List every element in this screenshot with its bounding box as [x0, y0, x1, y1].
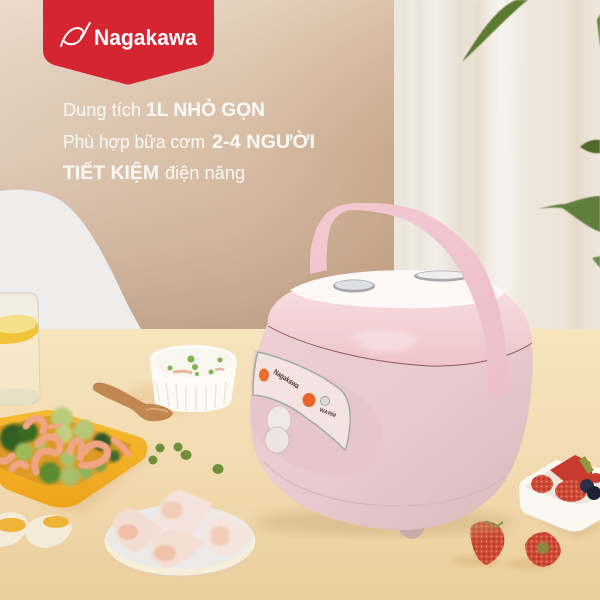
lid white top [290, 270, 505, 308]
cooker body [250, 300, 533, 530]
brand label: Nagakawa [272, 367, 302, 391]
peas [148, 442, 224, 474]
indicator warm [302, 393, 316, 407]
wall background [0, 0, 400, 335]
glass of lemon water [0, 293, 40, 405]
boiled eggs [0, 512, 72, 548]
indicator left [259, 368, 269, 382]
button top [267, 406, 291, 434]
plate of dumplings [104, 490, 256, 576]
feature line 2: 2-4 NGƯỜI [212, 131, 315, 153]
lid highlights [350, 329, 420, 352]
body lower seam [264, 462, 506, 506]
yellow dish with shrimp and broccoli [0, 407, 148, 512]
curtain [394, 0, 600, 335]
logo banner [43, 0, 214, 84]
logo icon [61, 23, 90, 46]
dumplings [113, 490, 252, 568]
feature line 3: TIẾT KIỆM [63, 162, 159, 184]
wooden spoon [93, 383, 173, 421]
table [0, 329, 600, 600]
white dish with berries [519, 455, 600, 540]
broccoli [0, 407, 120, 486]
soup toppings [168, 356, 224, 376]
feature line 1: Dung tích [63, 100, 141, 120]
soup bowl [125, 345, 237, 414]
chair [0, 190, 141, 329]
feature line 1: 1L NHỎ GỌN [146, 99, 265, 121]
plant leaves [462, 0, 600, 268]
release button [414, 270, 470, 282]
strawberries on table [452, 521, 561, 570]
feature line 3: điện năng [165, 163, 245, 183]
button bottom [265, 427, 289, 453]
cooker foot [396, 522, 426, 539]
cooker lid [268, 292, 532, 366]
steam knob [333, 280, 375, 292]
berries [531, 475, 553, 493]
rice cooker shadow [255, 508, 515, 536]
warm icon [320, 396, 330, 406]
handle [310, 203, 507, 399]
rice cooker [250, 203, 533, 539]
warm label: WARM [318, 407, 337, 420]
logo wordmark: Nagakawa [94, 25, 198, 50]
lid seam [268, 326, 532, 366]
control panel [250, 350, 382, 477]
display plate [253, 352, 350, 450]
shrimp [1, 418, 128, 472]
feature line 2: Phù hợp bữa cơm [63, 132, 205, 152]
